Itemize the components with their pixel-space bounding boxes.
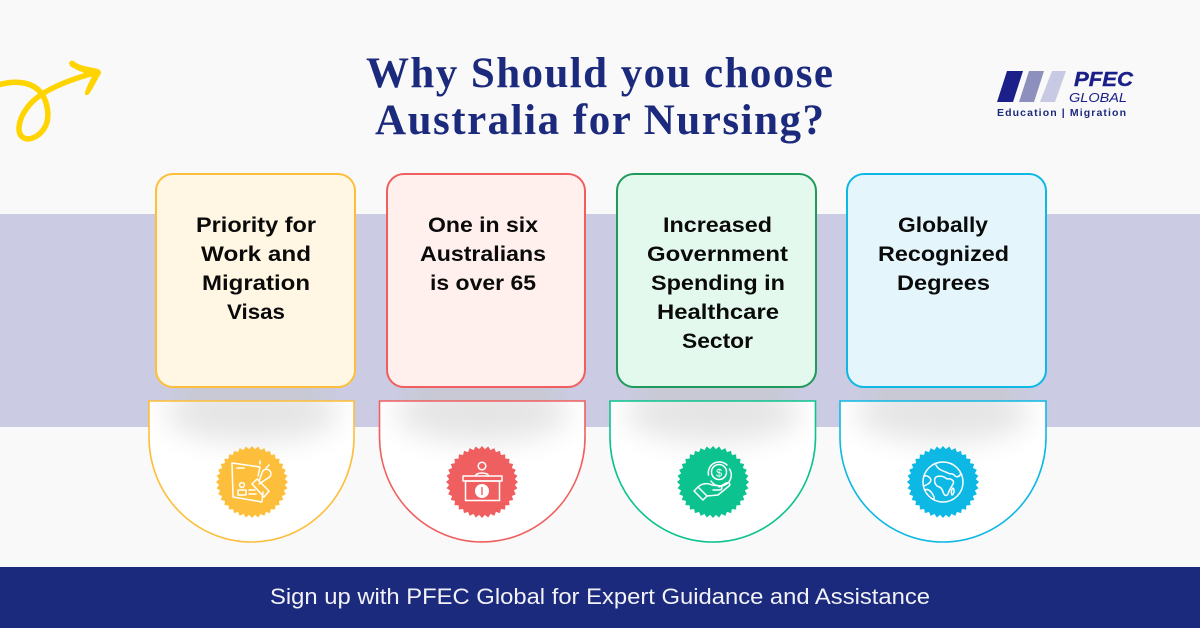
icon: yellow curly arrow (0, 61, 101, 139)
card text: Visas (227, 300, 285, 324)
logo: PFEC Global: PFEC (1074, 69, 1134, 91)
card text: Priority for (196, 213, 317, 237)
half circle outline (380, 401, 585, 542)
card text: Migration (202, 271, 310, 295)
card (617, 174, 816, 387)
card text (420, 213, 546, 295)
logo: PFEC Global: Education | Migration (997, 107, 1126, 119)
card text: Sector (682, 329, 754, 353)
panel: priority for work and migration visas (149, 174, 355, 542)
title (366, 50, 833, 144)
icon: hand holding dollar (677, 446, 749, 518)
card text: Spending in (651, 271, 785, 295)
soft shadow (393, 382, 573, 442)
icon: hand holding dollar: $ (716, 468, 722, 480)
card text: Globally (898, 213, 988, 237)
card (847, 174, 1046, 387)
card text: Recognized (878, 242, 1009, 266)
half circle base (840, 401, 1046, 542)
soft shadow (854, 382, 1034, 442)
half circle outline (610, 401, 816, 542)
half circle outline (149, 401, 354, 542)
lavender band (0, 214, 1200, 427)
footer bar (0, 567, 1200, 628)
card text: Degrees (897, 271, 990, 295)
card text (878, 213, 1009, 295)
panel: one in six australians is over 65 (380, 174, 585, 542)
card text: Increased (663, 213, 772, 237)
icon: passport and stamp (216, 446, 288, 518)
half circle base (149, 401, 354, 542)
card text: Work and (201, 242, 311, 266)
half circle outline (840, 401, 1046, 542)
card (156, 174, 355, 387)
card text: Australians (420, 242, 546, 266)
panel: globally recognized degrees (840, 174, 1046, 542)
logo: PFEC Global (997, 69, 1134, 119)
half circle base (610, 401, 816, 542)
half circle base (380, 401, 585, 542)
icon: globe (907, 446, 979, 518)
footer text: Sign up with PFEC Global for Expert Guidance and Assistance (270, 584, 930, 609)
icon: reception desk (446, 446, 518, 518)
card text (196, 213, 317, 324)
card text (647, 213, 788, 353)
card text: One in six (428, 213, 538, 237)
card text: Healthcare (657, 300, 779, 324)
card text: is over 65 (430, 271, 536, 295)
title: Australia for Nursing? (375, 97, 824, 144)
soft shadow (624, 382, 804, 442)
card (387, 174, 585, 387)
panel: increased government spending in healthcare sector (610, 174, 816, 542)
logo: PFEC Global: GLOBAL (1069, 90, 1127, 105)
card text: Government (647, 242, 788, 266)
soft shadow (163, 382, 343, 442)
title: Why Should you choose (366, 50, 833, 97)
